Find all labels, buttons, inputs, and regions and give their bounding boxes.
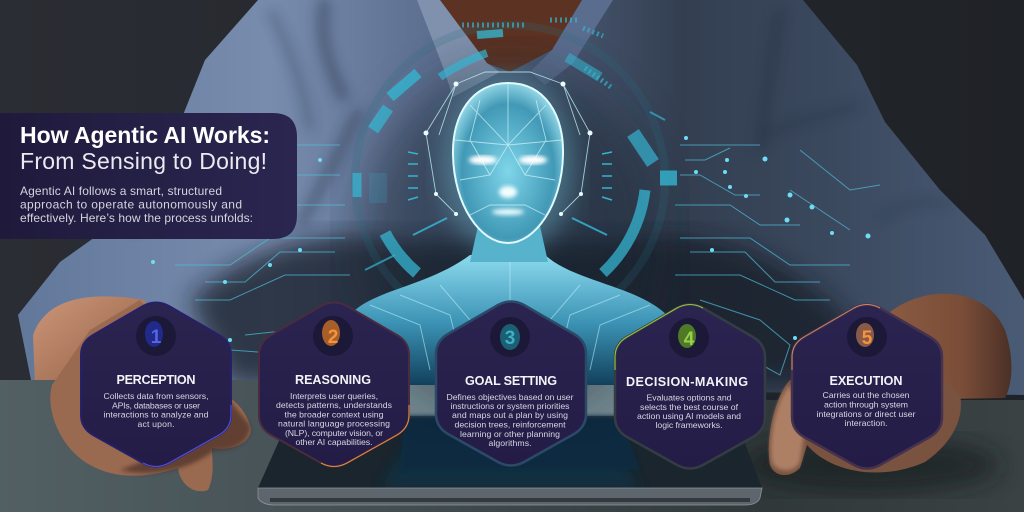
- description: action using AI models and: [637, 411, 741, 421]
- dark reflection below band: [400, 416, 640, 470]
- panel: title: [0, 113, 297, 239]
- collar left: [417, 0, 500, 97]
- description: interaction.: [844, 418, 888, 428]
- collar right: [530, 0, 613, 85]
- description: algorithms.: [488, 438, 532, 448]
- panel: decision-making: [615, 304, 765, 468]
- hologram robot figure: [353, 72, 667, 385]
- number badge 3: 3: [505, 328, 515, 349]
- panel: perception: [81, 302, 231, 466]
- number badge 4: 4: [684, 329, 695, 350]
- number badge 1: [136, 316, 176, 356]
- left hand: [50, 300, 251, 491]
- shirt: [18, 0, 1024, 395]
- table: [0, 380, 1024, 512]
- description: and maps out a plan by using: [452, 410, 568, 420]
- glow: [440, 75, 576, 255]
- accent edge: [321, 405, 409, 466]
- right forearm: [890, 294, 1011, 400]
- description: [276, 391, 393, 447]
- description: act upon.: [138, 419, 174, 429]
- description: action through system: [824, 400, 908, 410]
- accent edge: [792, 304, 880, 370]
- intro text: Agentic AI follows a smart, structured: [20, 184, 222, 198]
- shoulders and torso: [353, 255, 667, 385]
- description: Collects data from sensors,: [104, 391, 208, 401]
- description: Defines objectives based on user: [446, 392, 574, 402]
- description: Carries out the chosen: [822, 390, 910, 400]
- description: Interprets user queries,: [290, 391, 378, 401]
- hologram ring HUD: [355, 20, 677, 335]
- number badge 5: 5: [862, 328, 873, 349]
- number badge 3: [490, 317, 530, 357]
- description: natural language processing: [278, 418, 390, 428]
- head: [453, 83, 563, 243]
- accent edge: [143, 405, 231, 466]
- circuit dots: [151, 136, 870, 342]
- heading: How Agentic AI Works:: [20, 122, 270, 148]
- face mesh: [455, 84, 562, 215]
- description: instructions or system priorities: [450, 401, 570, 411]
- description: [104, 391, 209, 429]
- network nodes: [424, 82, 592, 216]
- description: decision trees, reinforcement: [454, 420, 566, 430]
- accent edge: [615, 304, 703, 370]
- label: DECISION-MAKING: [626, 375, 748, 389]
- label: EXECUTION: [830, 374, 902, 388]
- head network lines: [426, 72, 590, 214]
- number badge 2: [313, 316, 353, 356]
- central dark vignette: [360, 70, 660, 410]
- neck: [438, 0, 582, 72]
- description: Evaluates options and: [646, 392, 732, 402]
- description: APIs, databases or user: [112, 400, 200, 410]
- number badge 1: 1: [151, 327, 162, 348]
- left hand shading: [120, 395, 250, 473]
- number badge 4: [669, 318, 709, 358]
- description: (NLP), computer vision, or: [285, 428, 383, 438]
- label: REASONING: [295, 373, 371, 387]
- panel: reasoning: [259, 302, 409, 466]
- circuit board traces: [175, 145, 880, 375]
- right hand: [769, 335, 961, 475]
- label: GOAL SETTING: [465, 374, 557, 388]
- subheading: From Sensing to Doing!: [20, 148, 267, 174]
- torso mesh: [370, 262, 650, 380]
- number badge 5: [847, 317, 887, 357]
- nose and mouth: [492, 186, 524, 215]
- tablet: [258, 425, 762, 505]
- description: [637, 392, 741, 430]
- number badge 2: 2: [328, 327, 338, 348]
- description: [446, 392, 574, 448]
- panel: execution: [792, 304, 942, 468]
- belt band: [405, 381, 620, 416]
- description: selects the best course of: [640, 402, 739, 412]
- table shadow: [740, 437, 1000, 493]
- neck: [470, 226, 548, 262]
- dark shirt front and circuit zone: [190, 236, 850, 385]
- intro text: [20, 184, 253, 225]
- label: PERCEPTION: [116, 373, 196, 387]
- intro text: approach to operate autonomously and: [20, 198, 242, 212]
- description: detects patterns, understands: [276, 400, 393, 410]
- description: [816, 390, 916, 428]
- description: learning or other planning: [460, 429, 560, 439]
- intro text: effectively. Here’s how the process unfolds:: [20, 211, 253, 225]
- description: interactions to analyze and: [104, 410, 209, 420]
- shirt folds: [130, 0, 950, 230]
- panel: goal setting: [436, 302, 586, 466]
- right finger highlight: [771, 385, 806, 470]
- left forearm: [33, 296, 160, 395]
- eyes: [469, 156, 547, 164]
- description: integrations or direct user: [816, 409, 916, 419]
- description: the broader context using: [284, 410, 384, 420]
- description: logic frameworks.: [656, 420, 722, 430]
- description: other AI capabilities.: [296, 437, 372, 447]
